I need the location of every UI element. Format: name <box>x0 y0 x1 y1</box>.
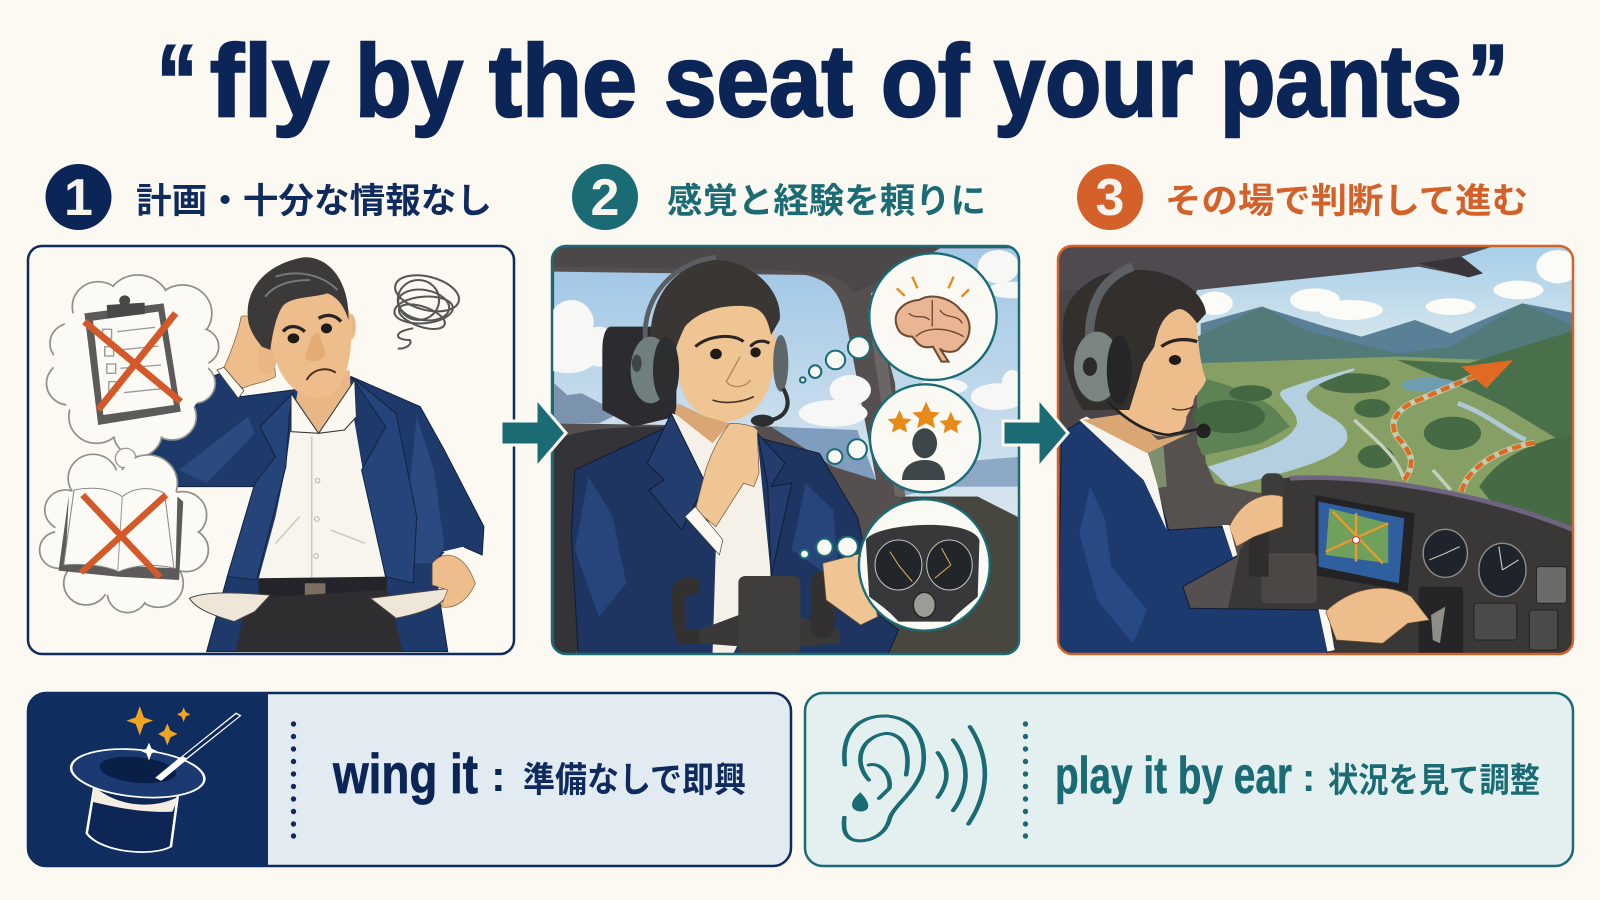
dotted divider <box>291 721 296 839</box>
title: seat <box>664 24 853 138</box>
title: pants <box>1220 24 1462 138</box>
meaning: wing it: 準備なしで即興 <box>523 761 746 800</box>
meaning: play it by ear: 状況を見て調整 <box>1328 762 1540 800</box>
title: fly <box>210 24 329 138</box>
step 1 heading <box>46 164 492 230</box>
icon: brain <box>869 253 997 380</box>
meaning: wing it: : <box>491 752 506 801</box>
phrase: play it by ear: play it by ear <box>1055 747 1292 805</box>
step 1 heading: 1 <box>64 169 93 227</box>
panel: play it by ear <box>805 693 1573 866</box>
title: the <box>489 24 637 138</box>
thought dots <box>800 336 870 558</box>
step 1 heading: 計画・十分な情報なし <box>136 182 492 221</box>
step 2 heading <box>572 164 986 230</box>
title: ” <box>1468 24 1508 138</box>
icon: stars and person <box>870 384 980 492</box>
route arrow <box>1393 360 1535 492</box>
title: “ <box>157 24 197 138</box>
icon: ear with sound waves <box>844 716 985 841</box>
icon: gauges <box>859 499 990 631</box>
meaning: play it by ear: : <box>1302 756 1315 800</box>
phrase: wing it: wing it <box>332 742 478 805</box>
dotted divider <box>1023 721 1028 839</box>
arrow: step 1 to 2 <box>501 398 566 468</box>
title: of <box>881 24 970 138</box>
control yoke and hand <box>671 553 878 654</box>
pilot in profile <box>1058 267 1445 654</box>
meaning: wing it <box>491 752 746 801</box>
step 2 heading: 感覚と経験を頼りに <box>667 182 986 221</box>
seat <box>554 327 678 654</box>
man with empty pockets <box>148 257 484 652</box>
title <box>157 24 1508 138</box>
thought bubble: clipboard <box>46 275 219 457</box>
step 3 heading: その場で判断して進む <box>1165 182 1528 221</box>
arrow: step 2 to 3 <box>1003 398 1068 468</box>
panel: step 1 no plan <box>28 246 514 654</box>
step 3 heading: 3 <box>1096 169 1124 227</box>
pilot with headset <box>571 257 899 654</box>
panel: step 2 cockpit thinking <box>537 246 1036 654</box>
panel: step 3 flying over valley <box>1058 245 1579 654</box>
landscape view <box>1194 247 1572 526</box>
panel: wing it <box>28 692 791 867</box>
icon panel: magic hat <box>28 692 268 867</box>
step 2 heading: 2 <box>591 169 619 227</box>
thought bubble: book <box>40 448 208 613</box>
title: your <box>994 24 1193 138</box>
windows with sky <box>537 247 1036 654</box>
step 3 heading <box>1077 164 1528 230</box>
title: by <box>355 24 463 138</box>
cockpit ceiling and dash <box>1058 245 1574 654</box>
icon: tangled scribble <box>393 274 460 350</box>
